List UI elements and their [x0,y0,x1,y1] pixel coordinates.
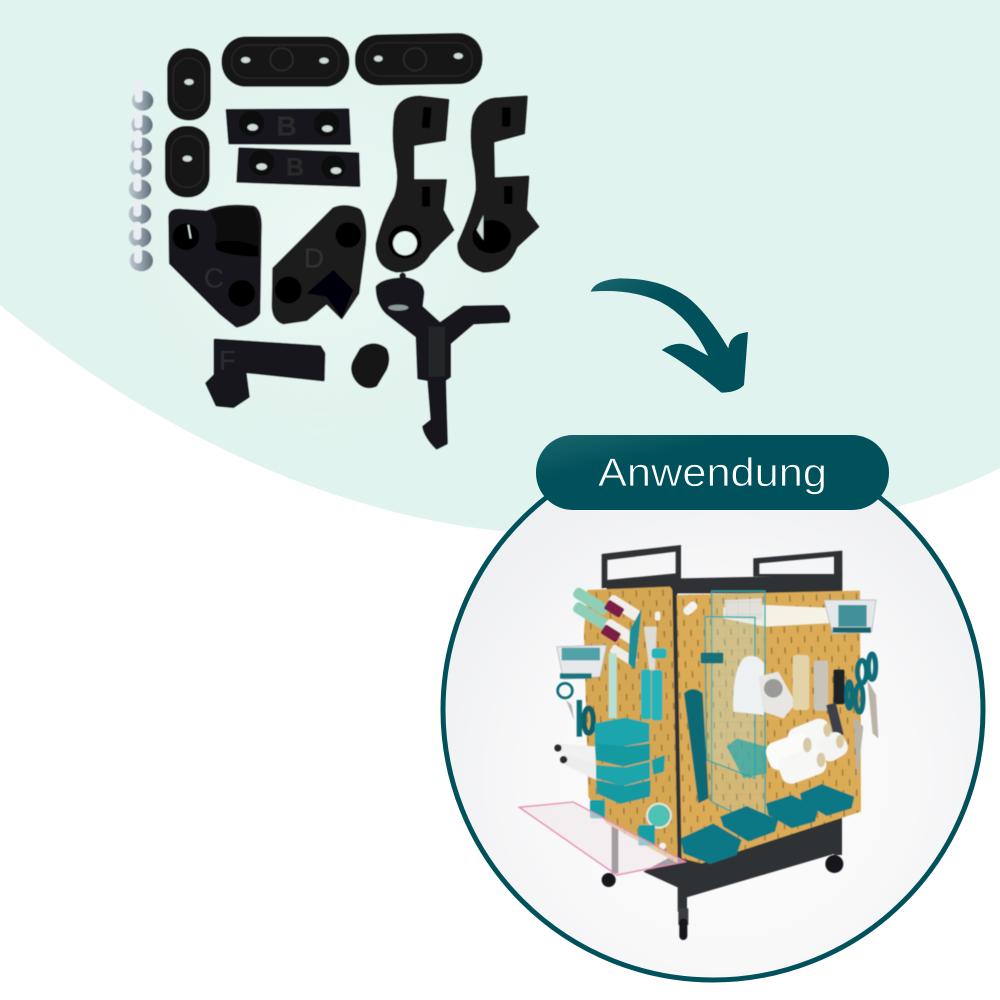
teal clips [590,755,665,846]
arrow [591,278,748,393]
photo: pegboard trolley [519,545,878,940]
hook part 1 [377,97,453,272]
B brackets: B [286,153,304,181]
B brackets: B [277,110,297,141]
part F [207,340,324,407]
white thread cones [765,718,848,784]
B brackets [227,109,359,186]
casters [602,855,843,940]
stacked teal boxes [595,718,651,804]
part C [169,206,261,327]
hook part 2 [458,97,538,272]
ribbon spools and trims [793,655,845,737]
Y-shaped lever [377,273,509,448]
white shelf [723,605,840,627]
oval parts A [165,48,211,197]
part C: C [204,262,224,293]
trolley frame [602,545,842,912]
dark teal boxes [681,784,854,864]
teal pliers [609,627,667,721]
heading text: Anwendung [598,451,827,495]
left pegboard [584,587,678,863]
pink ruler [519,802,685,875]
bobbin holder [758,672,796,718]
nut cap [351,343,389,388]
hanging thread tubes [572,586,642,670]
tape roll [647,804,671,828]
photo: 3D printed parts [80,3,560,470]
scissors [558,654,876,737]
long plates [222,33,483,87]
mint background shape [0,0,1000,536]
packages on shelf [725,598,762,620]
teal wire baskets [557,600,876,679]
acrylic rulers [701,591,767,828]
part D [273,206,365,323]
teal sewing gauge [684,689,709,803]
screws column [129,79,153,271]
part F: F [219,345,235,375]
soft light behind the parts [80,3,560,470]
right pegboard [677,591,861,863]
circular photo frame [443,440,983,980]
white knobs [655,600,699,849]
scissor blades [566,680,878,780]
heading pill [536,435,889,510]
thread cones on the left side [554,743,596,780]
part D: D [304,242,324,273]
